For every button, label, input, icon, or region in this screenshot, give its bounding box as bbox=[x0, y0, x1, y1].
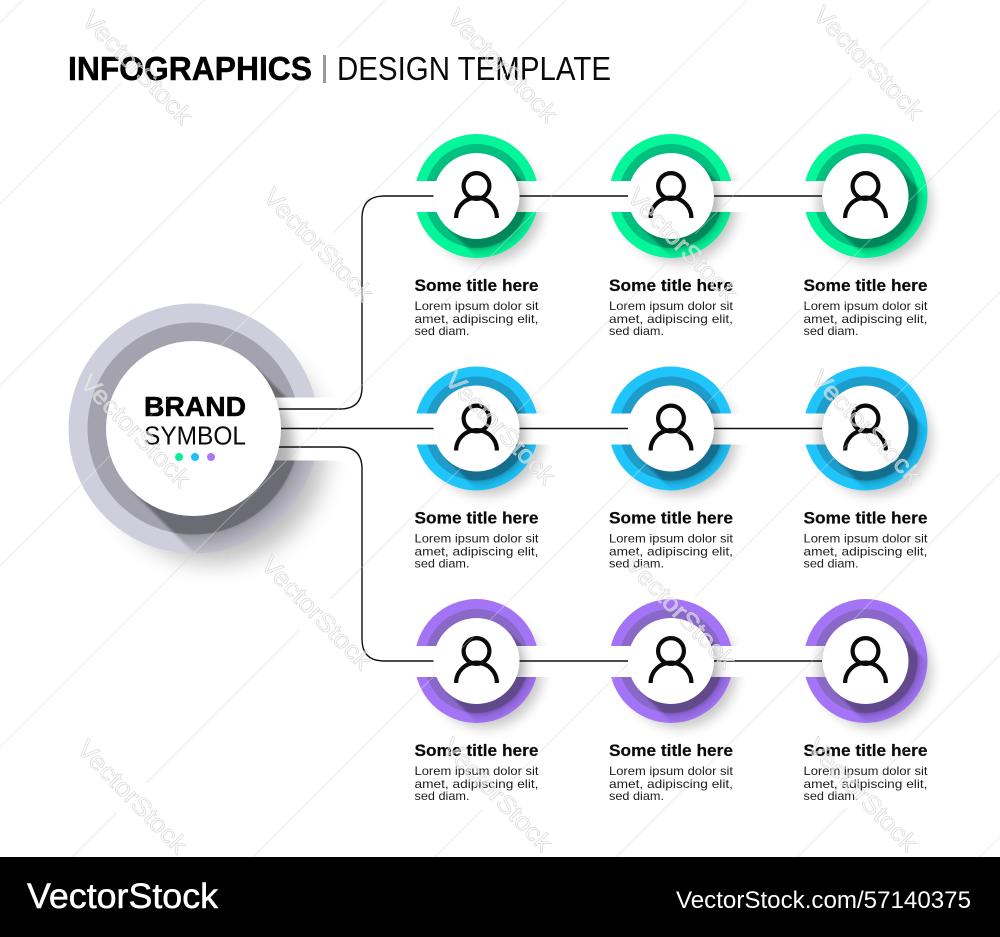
brand symbol rings bbox=[68, 304, 338, 574]
watermark overlay: VectorStock bbox=[439, 366, 561, 491]
watermark overlay: VectorStock bbox=[441, 4, 563, 129]
footer bar: VectorStock.com/57140375 bbox=[676, 887, 971, 914]
node: purple row, column 2: Lorem ipsum dolor sit bbox=[609, 764, 734, 778]
node: green row, column 1: Some title here bbox=[414, 277, 538, 295]
node: green row, column 1: amet, adipiscing elit, bbox=[414, 312, 538, 326]
node: blue row, column 3: sed diam. bbox=[804, 556, 858, 570]
node: blue row, column 3: Lorem ipsum dolor sit bbox=[804, 532, 928, 546]
node: green row, column 2: Lorem ipsum dolor sit bbox=[609, 299, 734, 313]
node: purple row, column 3: sed diam. bbox=[804, 789, 858, 803]
watermark overlay: VectorStock bbox=[805, 365, 927, 490]
watermark overlay: VectorStock bbox=[807, 1, 929, 126]
connector lines bbox=[278, 196, 822, 661]
node: green row, column 3: sed diam. bbox=[804, 324, 858, 338]
node: green row, column 1: sed diam. bbox=[414, 324, 470, 338]
watermark overlay: VectorStock bbox=[801, 733, 923, 858]
node: purple row, column 3: Lorem ipsum dolor sit bbox=[804, 764, 928, 778]
node: green row, column 1: Lorem ipsum dolor sit bbox=[414, 299, 539, 313]
node: blue row, column 1: amet, adipiscing elit, bbox=[414, 544, 538, 558]
title: INFOGRAPHICS bbox=[68, 50, 312, 87]
title: DESIGN TEMPLATE bbox=[337, 50, 611, 87]
brand label: SYMBOL bbox=[144, 420, 246, 450]
node: green row, column 2: Some title here bbox=[609, 277, 733, 295]
node: blue row, column 2: Some title here bbox=[609, 510, 733, 528]
brand symbol centre bbox=[106, 341, 281, 516]
brand label: BRAND bbox=[144, 391, 246, 422]
node: blue row, column 2: sed diam. bbox=[609, 556, 664, 570]
node: green row, column 2 bbox=[609, 134, 742, 335]
node: purple row, column 1: Some title here bbox=[414, 742, 538, 760]
node: blue row, column 1 bbox=[414, 366, 548, 568]
watermark overlay: VectorStock bbox=[74, 369, 196, 494]
node: green row, column 1 bbox=[414, 134, 548, 335]
node: blue row, column 1: Some title here bbox=[414, 510, 538, 528]
brand label bbox=[144, 391, 246, 461]
footer bar bbox=[0, 857, 1000, 937]
node: purple row, column 1 bbox=[414, 599, 548, 800]
node: purple row, column 3: amet, adipiscing elit, bbox=[804, 777, 928, 791]
node: green row, column 3 bbox=[804, 134, 937, 335]
node: green row, column 2: sed diam. bbox=[609, 324, 664, 338]
node: purple row, column 3 bbox=[804, 599, 937, 800]
node: blue row, column 2: Lorem ipsum dolor sit bbox=[609, 532, 734, 546]
watermark overlay: VectorStock bbox=[436, 733, 558, 858]
node: purple row, column 1: Lorem ipsum dolor sit bbox=[414, 764, 539, 778]
node: purple row, column 1: amet, adipiscing elit, bbox=[414, 777, 538, 791]
node: blue row, column 1: sed diam. bbox=[414, 556, 470, 570]
watermark overlay: VectorStock bbox=[76, 6, 198, 131]
node: green row, column 3: Some title here bbox=[804, 277, 928, 295]
node: green row, column 3: Lorem ipsum dolor sit bbox=[804, 299, 928, 313]
watermark overlay: VectorStock bbox=[621, 183, 743, 308]
node: green row, column 2: amet, adipiscing elit, bbox=[609, 312, 733, 326]
node: purple row, column 2: Some title here bbox=[609, 742, 733, 760]
node: purple row, column 3: Some title here bbox=[804, 742, 928, 760]
watermark overlay: VectorStock bbox=[255, 551, 377, 676]
node: blue row, column 3: amet, adipiscing elit, bbox=[804, 544, 928, 558]
node: purple row, column 2: amet, adipiscing elit, bbox=[609, 777, 733, 791]
node: blue row, column 2: amet, adipiscing elit, bbox=[609, 544, 733, 558]
node: purple row, column 1: sed diam. bbox=[414, 789, 470, 803]
watermark overlay: VectorStock bbox=[619, 550, 741, 675]
footer bar: VectorStock bbox=[27, 877, 219, 916]
node: purple row, column 2: sed diam. bbox=[609, 789, 664, 803]
node: purple row, column 2 bbox=[609, 599, 742, 800]
node: blue row, column 2 bbox=[609, 366, 742, 568]
title bbox=[68, 50, 611, 87]
node: blue row, column 1: Lorem ipsum dolor sit bbox=[414, 532, 539, 546]
watermark overlay: VectorStock bbox=[257, 183, 379, 308]
watermark overlay: VectorStock bbox=[71, 735, 193, 860]
node: green row, column 3: amet, adipiscing elit, bbox=[804, 312, 928, 326]
node: blue row, column 3: Some title here bbox=[804, 510, 928, 528]
node: blue row, column 3 bbox=[804, 366, 937, 568]
